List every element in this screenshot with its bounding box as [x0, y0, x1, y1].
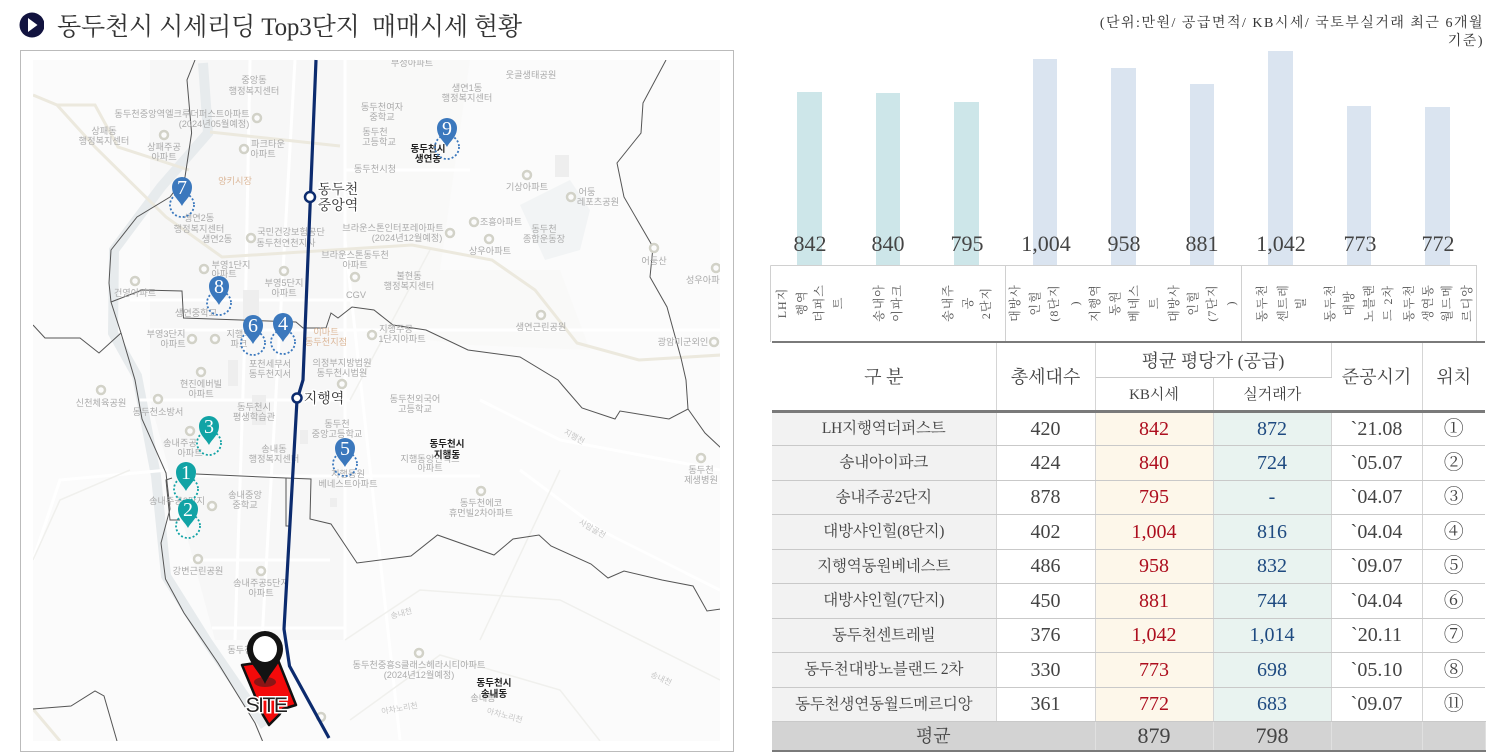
map pins: 9 — [442, 118, 452, 140]
price table: 683 — [1257, 693, 1287, 715]
map: 지행역 — [226, 328, 252, 339]
map: 아파트 — [342, 260, 368, 270]
label: 생연동: 생연동 — [415, 153, 441, 165]
map: 동두천시 — [237, 402, 271, 412]
map: 성우아파트 — [686, 275, 728, 285]
map: 생연근린공원 — [516, 322, 566, 332]
map: 동두천지점 — [305, 336, 347, 347]
price table: 지행역동원베네스트 — [817, 558, 950, 575]
price table: 동두천센트레빌 — [832, 627, 935, 644]
chart category axis: 대방 — [1341, 290, 1356, 316]
price table: 872 — [1257, 418, 1287, 440]
map: 아파트 — [271, 288, 297, 298]
price table: ⑪ — [1444, 693, 1464, 715]
map: 중앙동 — [241, 74, 267, 85]
map: CGV — [346, 290, 367, 300]
price table: 361 — [1030, 693, 1060, 715]
price table: 위치 — [1436, 367, 1471, 387]
map: 아파트 — [160, 339, 186, 349]
map: 중학교 — [369, 112, 395, 122]
map: 아파트 — [248, 588, 274, 598]
bar value labels: 1,042 — [1256, 231, 1306, 256]
map: 고등학교 — [362, 137, 396, 147]
label: 생연동: 동두천시 — [411, 143, 445, 155]
chart category axis: 송내아 — [871, 284, 886, 322]
chart category axis: 동두천 — [1322, 284, 1337, 322]
price table: 송내아이파크 — [839, 454, 928, 471]
price table: `04.04 — [1351, 590, 1402, 612]
price table: - — [1269, 486, 1275, 508]
price table: 1,014 — [1250, 624, 1294, 646]
label: 지행동: 동두천시 — [430, 438, 464, 450]
price table: 실거래가 — [1243, 387, 1301, 403]
map pins: 5 — [340, 438, 350, 460]
map: 송내천 — [389, 605, 413, 621]
map pins: 4 — [278, 313, 288, 335]
map: 동두천 — [324, 419, 350, 429]
bar value labels: 1,004 — [1021, 231, 1071, 256]
map: (2024년12월예정) — [384, 669, 454, 680]
price table: 878 — [1030, 486, 1060, 508]
chart category axis: 공 — [961, 297, 975, 309]
map: 국민건강보험공단 — [257, 227, 325, 237]
chart category axis: 센트레 — [1275, 284, 1290, 322]
price table: 1,042 — [1132, 624, 1176, 646]
map: 지행동원 — [331, 468, 365, 479]
map: 부성아파트 — [391, 58, 433, 68]
map: 조흥아파트 — [480, 216, 522, 227]
price table: `09.07 — [1351, 693, 1402, 715]
panel: map frame — [20, 50, 734, 752]
map: 아차노리천 — [380, 700, 418, 716]
price table: 450 — [1030, 590, 1060, 612]
bar value labels: 842 — [794, 231, 826, 256]
map: 포천세무서 — [249, 359, 291, 369]
price table: 330 — [1030, 659, 1060, 681]
chart category axis: 인힐 — [1185, 290, 1200, 316]
unit note — [1100, 14, 1484, 48]
bar value labels: 881 — [1186, 231, 1218, 256]
map: 동두천연천지사 — [256, 238, 316, 248]
map: 신천체육공원 — [76, 398, 126, 408]
map: 동두천시청 — [354, 164, 396, 174]
map: 강변근린공원 — [173, 566, 223, 576]
map: 송내천 — [649, 669, 673, 687]
price table: 대방샤인힐(7단지) — [823, 592, 944, 609]
map: 생연2동 — [202, 234, 232, 244]
map: 현진에버빌 — [180, 379, 222, 389]
price table: `09.07 — [1351, 555, 1402, 577]
price table: `21.08 — [1351, 418, 1402, 440]
map: 지행동양인벡스 — [400, 453, 460, 464]
label: 송내동: 송내동 — [481, 688, 507, 700]
price table: 486 — [1030, 555, 1060, 577]
price table: 816 — [1257, 521, 1287, 543]
unit note: (단위:만원/ 공급면적/ KB시세/ 국토부실거래 최근 6개월 — [1100, 16, 1484, 31]
station: 동두천중앙역: 동두천 — [318, 181, 358, 198]
map pins: 3 — [204, 416, 214, 438]
chart category axis: 동원 — [1107, 290, 1122, 316]
price table: 840 — [1139, 452, 1169, 474]
unit note: 기준) — [1448, 34, 1484, 48]
price table: ③ — [1444, 486, 1464, 508]
map: 상패주공 — [147, 142, 181, 152]
map: 파크 — [231, 339, 247, 349]
price table: 832 — [1257, 555, 1287, 577]
map: 동두천외국어 — [390, 393, 440, 404]
chart category axis: (7단지 — [1204, 284, 1219, 322]
chart category axis: ) — [1224, 300, 1238, 306]
price table: 402 — [1030, 521, 1060, 543]
price table: 842 — [1139, 418, 1169, 440]
bar value labels: 840 — [872, 231, 904, 256]
site marker: SITE — [246, 694, 288, 717]
map: 송내주공2단지 — [149, 496, 205, 506]
map: 이마트 — [313, 327, 339, 337]
chart category axis: 행역 — [794, 290, 809, 316]
price table: 동두천생연동월드메르디앙 — [795, 696, 972, 713]
map: 동두천 — [531, 224, 557, 234]
map: 어둥 — [579, 187, 595, 197]
price table: `20.11 — [1351, 624, 1402, 646]
icon: title arrow — [20, 12, 44, 38]
price table: 구 분 — [864, 367, 903, 387]
chart category axis: 르디앙 — [1459, 284, 1474, 322]
chart category axis: 대방사 — [1166, 284, 1181, 322]
map: 아파트 — [211, 269, 237, 279]
chart category axis: 빌 — [1293, 297, 1308, 309]
map: 아파트 — [417, 463, 443, 473]
map: 브라운스톤동두천 — [321, 250, 389, 260]
price table: 평균 — [916, 726, 951, 746]
map: 행정복지센터 — [174, 223, 224, 234]
price table: `04.07 — [1351, 486, 1402, 508]
map: 아파트 — [151, 152, 177, 162]
price table: 772 — [1139, 693, 1169, 715]
map: 송내동 — [261, 444, 287, 454]
chart category axis: 노블랜 — [1361, 284, 1376, 322]
map: 제생병원 — [684, 475, 718, 485]
map: 동두천중흥S클래스헤라시티아파트 — [353, 659, 485, 670]
price table: 795 — [1139, 486, 1169, 508]
chart category axis: 월드메 — [1439, 284, 1454, 322]
map: 송내중앙 — [228, 489, 262, 500]
map: 동두천 — [227, 645, 253, 655]
price table: 대방샤인힐(8단지) — [823, 523, 944, 540]
map: 송내동 — [470, 693, 496, 703]
map: 건영아파트 — [114, 288, 156, 298]
map: 평생학습관 — [233, 412, 276, 422]
map: 사암골천 — [577, 517, 608, 540]
price table: ② — [1444, 452, 1464, 474]
map pins: 8 — [214, 276, 224, 298]
map: 생연중학교 — [175, 308, 217, 318]
map: 양키시장 — [218, 176, 252, 186]
map: 동두천중앙역엘크루더퍼스트아파트 — [114, 108, 250, 119]
map: 동두천지서 — [249, 369, 291, 379]
price table: 798 — [1256, 723, 1288, 748]
price table: 1,004 — [1132, 521, 1176, 543]
chart category axis: 이파크 — [889, 284, 904, 322]
map: 의정부지방법원 — [312, 358, 372, 368]
map: 어둥산 — [641, 256, 667, 266]
bar value labels: 772 — [1422, 231, 1454, 256]
price table: `05.07 — [1351, 452, 1402, 474]
map pins: 1 — [181, 462, 191, 484]
price table: 424 — [1030, 452, 1060, 474]
map: 부영1단지 — [212, 260, 250, 270]
price table: 평균 평당가 (공급) — [1142, 351, 1284, 371]
label: 송내동: 동두천시 — [477, 677, 511, 689]
station: 동두천중앙역: 중앙역 — [318, 197, 358, 214]
chart category axis: (8단지 — [1046, 284, 1061, 322]
map pins: 6 — [248, 315, 258, 337]
price table: 698 — [1257, 659, 1287, 681]
station: 지행역: 지행역 — [304, 390, 344, 407]
map pins: 2 — [183, 499, 193, 521]
price table: 881 — [1139, 590, 1169, 612]
map: 생연1동 — [452, 83, 482, 93]
map: 불현동 — [396, 271, 422, 281]
map: 동두천 — [688, 465, 714, 475]
map: 1단지아파트 — [378, 334, 426, 344]
bar value labels: 958 — [1108, 231, 1140, 256]
map: 동두천 — [362, 127, 388, 137]
map: 웃골생태공원 — [506, 70, 556, 80]
map: 동두천소방서 — [133, 407, 183, 417]
price table: `05.10 — [1351, 659, 1402, 681]
price table: ④ — [1444, 521, 1464, 543]
map: 휴먼빌2차아파트 — [449, 507, 513, 518]
map: (2024년12월예정) — [372, 232, 442, 243]
map: 아파트 — [250, 149, 276, 159]
map: 베네스트아파트 — [318, 479, 378, 489]
map: 상패동 — [91, 126, 117, 136]
map: 행정복지센터 — [229, 85, 279, 96]
map: 송내주공 — [163, 438, 197, 448]
price table: 376 — [1030, 624, 1060, 646]
label: 지행동: 지행동 — [434, 449, 460, 461]
map: 브라운스톤인터포레아파트 — [342, 223, 444, 233]
map: 레포츠공원 — [577, 197, 619, 207]
chart category axis: 트 — [831, 297, 845, 309]
chart category axis: 송내주 — [940, 284, 955, 322]
map: 광암미군외인 — [658, 336, 708, 347]
map: 행정복지센터 — [384, 280, 434, 291]
chart category axis: 2단지 — [978, 287, 993, 319]
map: 행정복지센터 — [249, 453, 299, 464]
price table: KB시세 — [1129, 387, 1179, 403]
chart category axis: 베네스 — [1126, 284, 1141, 322]
price table: 879 — [1138, 723, 1170, 748]
map — [33, 60, 720, 741]
price table: ⑤ — [1444, 555, 1464, 577]
price table: 773 — [1139, 659, 1169, 681]
map: 중학교 — [232, 500, 258, 510]
map: 동두천시법원 — [317, 368, 367, 378]
price table: ① — [1444, 418, 1464, 440]
map: 동두천에코 — [460, 498, 502, 508]
chart category axis: 대방사 — [1007, 284, 1022, 322]
map: 동두천여자 — [361, 101, 404, 112]
price table: 744 — [1257, 590, 1287, 612]
price table: 총세대수 — [1011, 367, 1080, 387]
price table: ⑥ — [1444, 590, 1464, 612]
map: 아파트 — [177, 448, 203, 458]
map: 부영3단지 — [147, 329, 185, 339]
map: 상우아파트 — [469, 246, 511, 256]
map: 행정복지센터 — [79, 135, 129, 146]
map: 기상아파트 — [506, 182, 548, 192]
map: 지행주공 — [379, 323, 413, 334]
price table: ⑧ — [1444, 659, 1464, 681]
price table: 준공시기 — [1342, 367, 1411, 387]
map: 부영5단지 — [265, 278, 303, 288]
chart category axis: 드 2차 — [1380, 285, 1395, 321]
chart category axis: 지행역 — [1087, 284, 1102, 322]
chart category axis: 트 — [1147, 297, 1161, 309]
map: 종합운동장 — [523, 234, 566, 244]
map: 생연2동 — [184, 213, 214, 223]
price table: 동두천대방노블랜드 2차 — [804, 661, 963, 678]
price table: 송내주공2단지 — [836, 489, 932, 506]
map: (2024년05월예정) — [179, 118, 249, 129]
map: 송내주공5단지 — [233, 578, 289, 588]
chart category axis: 인힐 — [1027, 290, 1042, 316]
price table: `04.04 — [1351, 521, 1402, 543]
map: 아파트 — [188, 389, 214, 399]
chart category axis: 생연동 — [1420, 284, 1435, 322]
chart category axis: 동두천 — [1254, 284, 1269, 322]
map: 파크타운 — [251, 139, 285, 149]
map: 고등학교 — [398, 404, 432, 414]
title: 동두천시 시세리딩 Top3단지 매매시세 현황 — [57, 14, 522, 41]
chart category axis: 더퍼스 — [811, 284, 826, 322]
price table: 724 — [1257, 452, 1287, 474]
bar value labels: 795 — [950, 231, 984, 256]
chart category axis: LH지 — [774, 288, 789, 318]
price table: 420 — [1030, 418, 1060, 440]
map: 중앙고등학교 — [312, 428, 362, 439]
chart category axis: ) — [1068, 300, 1082, 306]
map: 지행천 — [562, 427, 587, 446]
map: 아차노리천 — [486, 706, 524, 725]
price table — [772, 341, 1486, 752]
price table: ⑦ — [1444, 624, 1464, 646]
map pins: 7 — [177, 177, 187, 199]
chart category axis: 동두천 — [1401, 284, 1416, 322]
map: 행정복지센터 — [442, 92, 492, 103]
price table: LH지행역더퍼스트 — [822, 420, 946, 437]
bar value labels: 773 — [1344, 231, 1376, 256]
price table: 958 — [1139, 555, 1169, 577]
